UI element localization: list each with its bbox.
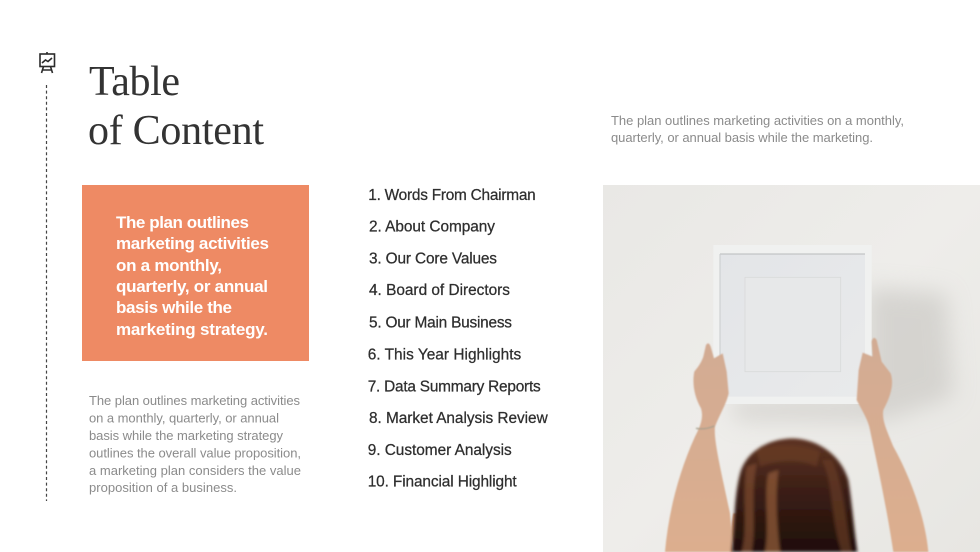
picture frame	[713, 245, 872, 404]
top right text block	[611, 113, 904, 145]
body text block: The plan outlines marketing activities	[89, 393, 300, 408]
title	[88, 59, 264, 154]
title: of Content	[88, 108, 264, 154]
callout text: marketing activities	[116, 234, 269, 253]
callout text: basis while the	[116, 298, 232, 317]
item 1: 1. Words From Chairman	[368, 187, 536, 204]
table of contents list	[368, 187, 549, 491]
arms and hands	[665, 338, 928, 552]
top right text block: quarterly, or annual basis while the marketing.	[611, 130, 873, 145]
title: Table	[89, 59, 180, 105]
top right text block: The plan outlines marketing activities on a monthly,	[611, 113, 904, 128]
item 6: 6. This Year Highlights	[368, 346, 521, 363]
body text block: a marketing plan considers the value	[89, 463, 301, 478]
body text block	[89, 393, 301, 495]
callout text: marketing strategy.	[116, 320, 268, 339]
item 5: 5. Our Main Business	[369, 314, 512, 332]
item 2: 2. About Company	[369, 218, 495, 236]
icon: presentation board with chart	[40, 52, 54, 73]
callout text: The plan outlines	[116, 213, 249, 232]
item 4: 4. Board of Directors	[369, 282, 510, 299]
panel: orange callout	[82, 185, 309, 361]
dashed timeline line	[46, 85, 48, 501]
item 3: 3. Our Core Values	[369, 250, 497, 267]
callout text: quarterly, or annual	[116, 277, 268, 296]
photo: woman holding a white picture frame	[603, 185, 980, 552]
body text block: basis while the marketing strategy	[89, 428, 284, 443]
body text block: outlines the overall value proposition,	[89, 446, 301, 460]
item 8: 8. Market Analysis Review	[369, 410, 549, 427]
item 7: 7. Data Summary Reports	[368, 378, 541, 395]
frame shadow on wall	[733, 287, 953, 420]
body text block: proposition of a business.	[89, 480, 237, 495]
item 10: 10. Financial Highlight	[368, 474, 517, 491]
hair	[732, 438, 857, 552]
body text block: on a monthly, quarterly, or annual	[89, 410, 279, 426]
callout text	[116, 213, 269, 339]
callout text: on a monthly,	[116, 256, 222, 275]
item 9: 9. Customer Analysis	[368, 442, 512, 459]
